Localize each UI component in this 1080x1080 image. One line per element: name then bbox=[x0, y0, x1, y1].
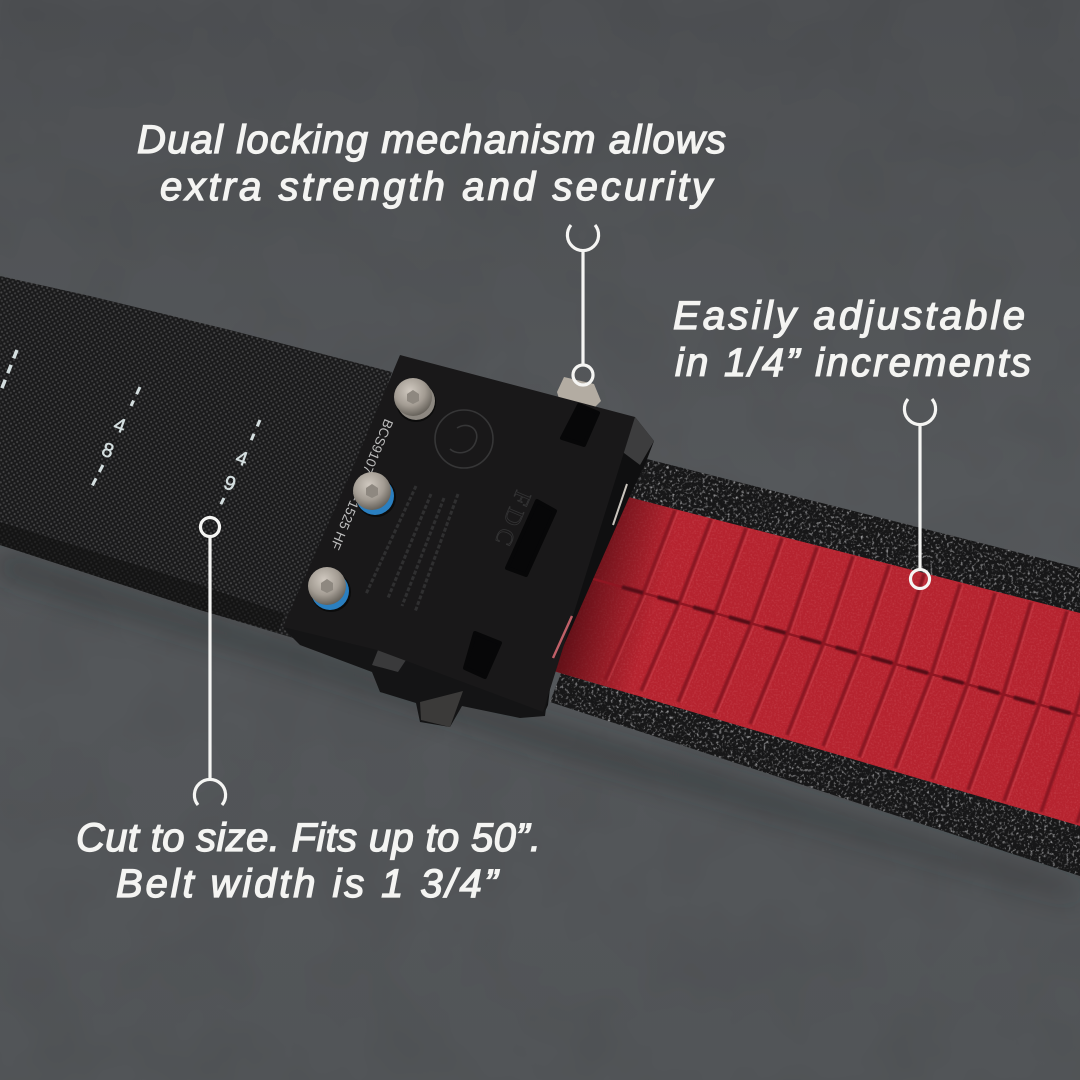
belt shadow bbox=[0, 552, 1080, 900]
caption: dual locking mechanism: Dual locking mechanism allows bbox=[137, 118, 726, 162]
caption: cut to size: Cut to size. Fits up to 50”. bbox=[76, 816, 541, 860]
caption: cut to size: Belt width is 1 3/4” bbox=[116, 862, 500, 906]
metal side tip bbox=[620, 417, 654, 465]
slots bbox=[465, 405, 598, 677]
red track clips bbox=[553, 484, 627, 658]
size mark line far left bbox=[0, 350, 17, 393]
size mark 4 8: 8 bbox=[99, 439, 117, 463]
buckle plate bbox=[283, 355, 635, 712]
caption: easily adjustable: in 1/4” increments bbox=[675, 341, 1031, 385]
caption: easily adjustable: Easily adjustable bbox=[673, 294, 1025, 338]
screw top bbox=[394, 378, 436, 422]
ratchet track: red segments bbox=[545, 490, 1080, 830]
size mark 4 9 bbox=[218, 420, 260, 510]
belt: left woven strap with size markings bbox=[0, 276, 392, 640]
logo ring bbox=[435, 410, 493, 468]
size mark 4 8 bbox=[91, 387, 140, 488]
size mark 4 9: 4 bbox=[233, 447, 251, 471]
top locking tab bbox=[557, 377, 601, 412]
caption: dual locking mechanism: extra strength and security bbox=[160, 165, 715, 209]
callout line: dual locking bbox=[567, 225, 599, 385]
size mark 4 8: 4 bbox=[111, 414, 129, 438]
engraved spec lines bbox=[366, 486, 458, 612]
buckle lower body and hardware bbox=[283, 560, 560, 727]
screws bbox=[308, 378, 436, 612]
shadow gap between buckle and track bbox=[500, 417, 654, 716]
belt: right webbing bbox=[540, 450, 1080, 880]
size mark 4 9: 9 bbox=[221, 472, 239, 496]
FDC engraving: FDC bbox=[487, 487, 535, 554]
caption: easily adjustable bbox=[673, 294, 1031, 385]
caption: cut to size bbox=[76, 816, 541, 906]
screw middle bbox=[353, 472, 396, 517]
buckle bbox=[283, 355, 654, 727]
screw bottom bbox=[308, 567, 351, 612]
part number: BCS9107 100-1525 HF bbox=[327, 417, 396, 552]
callout line: cut to size bbox=[194, 518, 226, 805]
caption: dual locking mechanism bbox=[137, 118, 726, 209]
callout line: adjustable bbox=[904, 399, 936, 588]
